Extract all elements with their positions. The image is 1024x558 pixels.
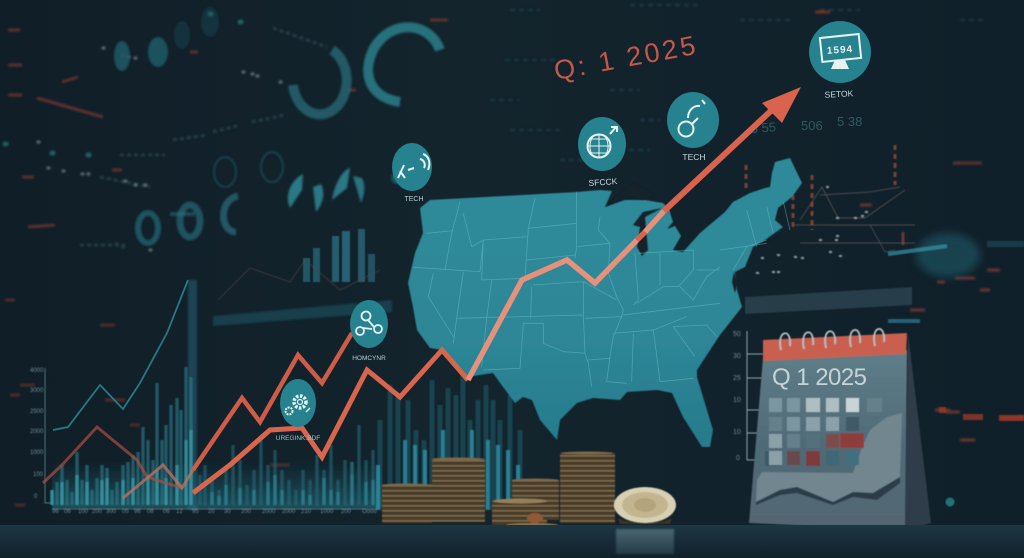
calendar axis: 30 bbox=[733, 353, 741, 360]
chart axis labels: 210 bbox=[301, 509, 312, 515]
chart axis labels: 0 bbox=[34, 494, 38, 500]
calendar bbox=[749, 329, 931, 530]
arrow head bbox=[762, 87, 801, 123]
faded lower-left line bbox=[43, 427, 182, 488]
icon: monitor sector bbox=[809, 21, 871, 83]
line over Michigan bbox=[645, 211, 664, 232]
chart axis labels: 3000 bbox=[30, 388, 44, 394]
red trend lines bbox=[43, 87, 801, 498]
mini bar chart upper centre bbox=[303, 229, 375, 282]
chart axis labels: 1000 bbox=[30, 450, 44, 456]
calendar axis: 50 bbox=[733, 331, 741, 338]
main line over map bbox=[468, 240, 637, 380]
dim sector numbers: 5 38 bbox=[837, 114, 862, 129]
dim sector numbers: 3 55 bbox=[750, 119, 776, 136]
chart axis labels: 2500 bbox=[30, 409, 44, 415]
icon: monitor sector: 1594 bbox=[827, 44, 854, 57]
stack 5 bbox=[560, 452, 615, 523]
chart axis labels: 200 bbox=[241, 509, 252, 515]
chart axis labels bbox=[30, 368, 377, 515]
chart axis labels: 06 bbox=[163, 509, 170, 515]
standing coin bbox=[614, 487, 676, 524]
dim sector numbers: 506 bbox=[801, 118, 823, 133]
calendar axis: 0 bbox=[736, 455, 740, 462]
chart axis labels: 200 bbox=[92, 509, 103, 515]
map landmass bbox=[408, 158, 802, 447]
bars bbox=[52, 367, 191, 505]
blobs bbox=[114, 7, 403, 184]
chart axis labels: 30 bbox=[224, 509, 231, 515]
chart axis labels: 05 bbox=[122, 509, 129, 515]
chart axis labels: 2000 bbox=[30, 429, 44, 435]
stack 1 bbox=[382, 484, 432, 523]
faint thin chart lines mid-left bbox=[218, 260, 380, 300]
coin reflection bbox=[616, 529, 674, 554]
vertical band bbox=[188, 280, 197, 510]
chart axis labels: 20 bbox=[208, 509, 215, 515]
main line bbox=[193, 350, 468, 493]
teal glow blob bbox=[916, 233, 980, 277]
calendar chart line bbox=[756, 477, 900, 505]
label: TECH: TECH bbox=[682, 152, 706, 162]
donut: large ring bbox=[293, 50, 347, 114]
calendar page bbox=[749, 350, 907, 530]
upper line bbox=[193, 333, 352, 470]
left bar chart bbox=[45, 367, 520, 510]
chart axis labels: 08 bbox=[147, 509, 154, 515]
chart axis labels: 300 bbox=[106, 509, 117, 515]
chart axis labels: 95 bbox=[192, 509, 199, 515]
bars behind coins bbox=[380, 370, 520, 510]
teal line chart bbox=[53, 280, 188, 430]
chart axis labels: 2000 bbox=[262, 509, 276, 515]
donut: small rings bbox=[138, 152, 283, 243]
chart axis labels: 1000 bbox=[320, 509, 334, 515]
chart axis labels: 2000 bbox=[282, 509, 296, 515]
title: Q1 2025: Q: 1 2025 bbox=[552, 30, 698, 86]
calendar rings bbox=[780, 329, 884, 350]
faded secondary line bbox=[123, 465, 193, 498]
horizontal band bbox=[213, 300, 392, 326]
bar haze bbox=[52, 460, 382, 508]
right scatter chart bbox=[745, 145, 1024, 538]
chart axis labels: Oooo bbox=[362, 509, 377, 515]
icon: network nodes bbox=[350, 300, 388, 348]
calendar grid bbox=[765, 398, 882, 466]
great lakes bbox=[605, 183, 777, 293]
dim sector numbers bbox=[750, 114, 862, 136]
label: HOMCYNR: HOMCYNR bbox=[352, 355, 386, 362]
chart axis labels: 06 bbox=[64, 509, 71, 515]
chart axis labels: 4000 bbox=[30, 368, 44, 374]
calendar axis: 10 bbox=[733, 429, 741, 436]
label: UREGINK.BDF: UREGINK.BDF bbox=[276, 435, 320, 442]
table floor bbox=[0, 525, 1024, 558]
band panels bbox=[188, 280, 392, 510]
calendar axis bbox=[733, 331, 763, 462]
chart axis labels: 96 bbox=[52, 509, 59, 515]
state borders bbox=[413, 192, 790, 387]
coin stacks bbox=[382, 452, 676, 527]
main arrow shaft bbox=[664, 107, 775, 211]
icon: gears bbox=[280, 379, 316, 427]
stack 4 back bbox=[512, 478, 559, 520]
grey band bbox=[745, 287, 912, 314]
calendar axis: 25 bbox=[733, 375, 741, 382]
stack 3 front bbox=[492, 498, 558, 527]
chart axis labels: 96 bbox=[134, 509, 141, 515]
donut charts bbox=[114, 7, 440, 243]
USA map bbox=[408, 158, 802, 447]
calendar axis: 10 bbox=[733, 397, 741, 404]
chart axis labels: 100 bbox=[33, 472, 44, 478]
pie charts bbox=[288, 168, 364, 212]
label: SETOK: SETOK bbox=[824, 88, 854, 100]
label: SFCCK: SFCCK bbox=[588, 176, 618, 188]
chart axis labels: 12 bbox=[176, 509, 183, 515]
stack 2 bbox=[432, 458, 485, 522]
chart axis labels: 100 bbox=[78, 509, 89, 515]
line over Lake Michigan bbox=[637, 232, 645, 240]
calendar red header bbox=[763, 333, 907, 361]
calendar back leg bbox=[905, 333, 931, 530]
label: TECH small: TECH bbox=[404, 196, 424, 203]
chart axis labels: 200 bbox=[341, 509, 352, 515]
calendar title: Q 1 2025 bbox=[772, 364, 867, 391]
calendar lower light area bbox=[756, 413, 902, 502]
icon: gauge tech bbox=[667, 92, 719, 148]
chart axes bbox=[45, 368, 380, 509]
icon: wifi tech bbox=[392, 143, 432, 191]
donut: large C arc bbox=[368, 27, 440, 102]
icon: globe stock bbox=[578, 117, 626, 171]
